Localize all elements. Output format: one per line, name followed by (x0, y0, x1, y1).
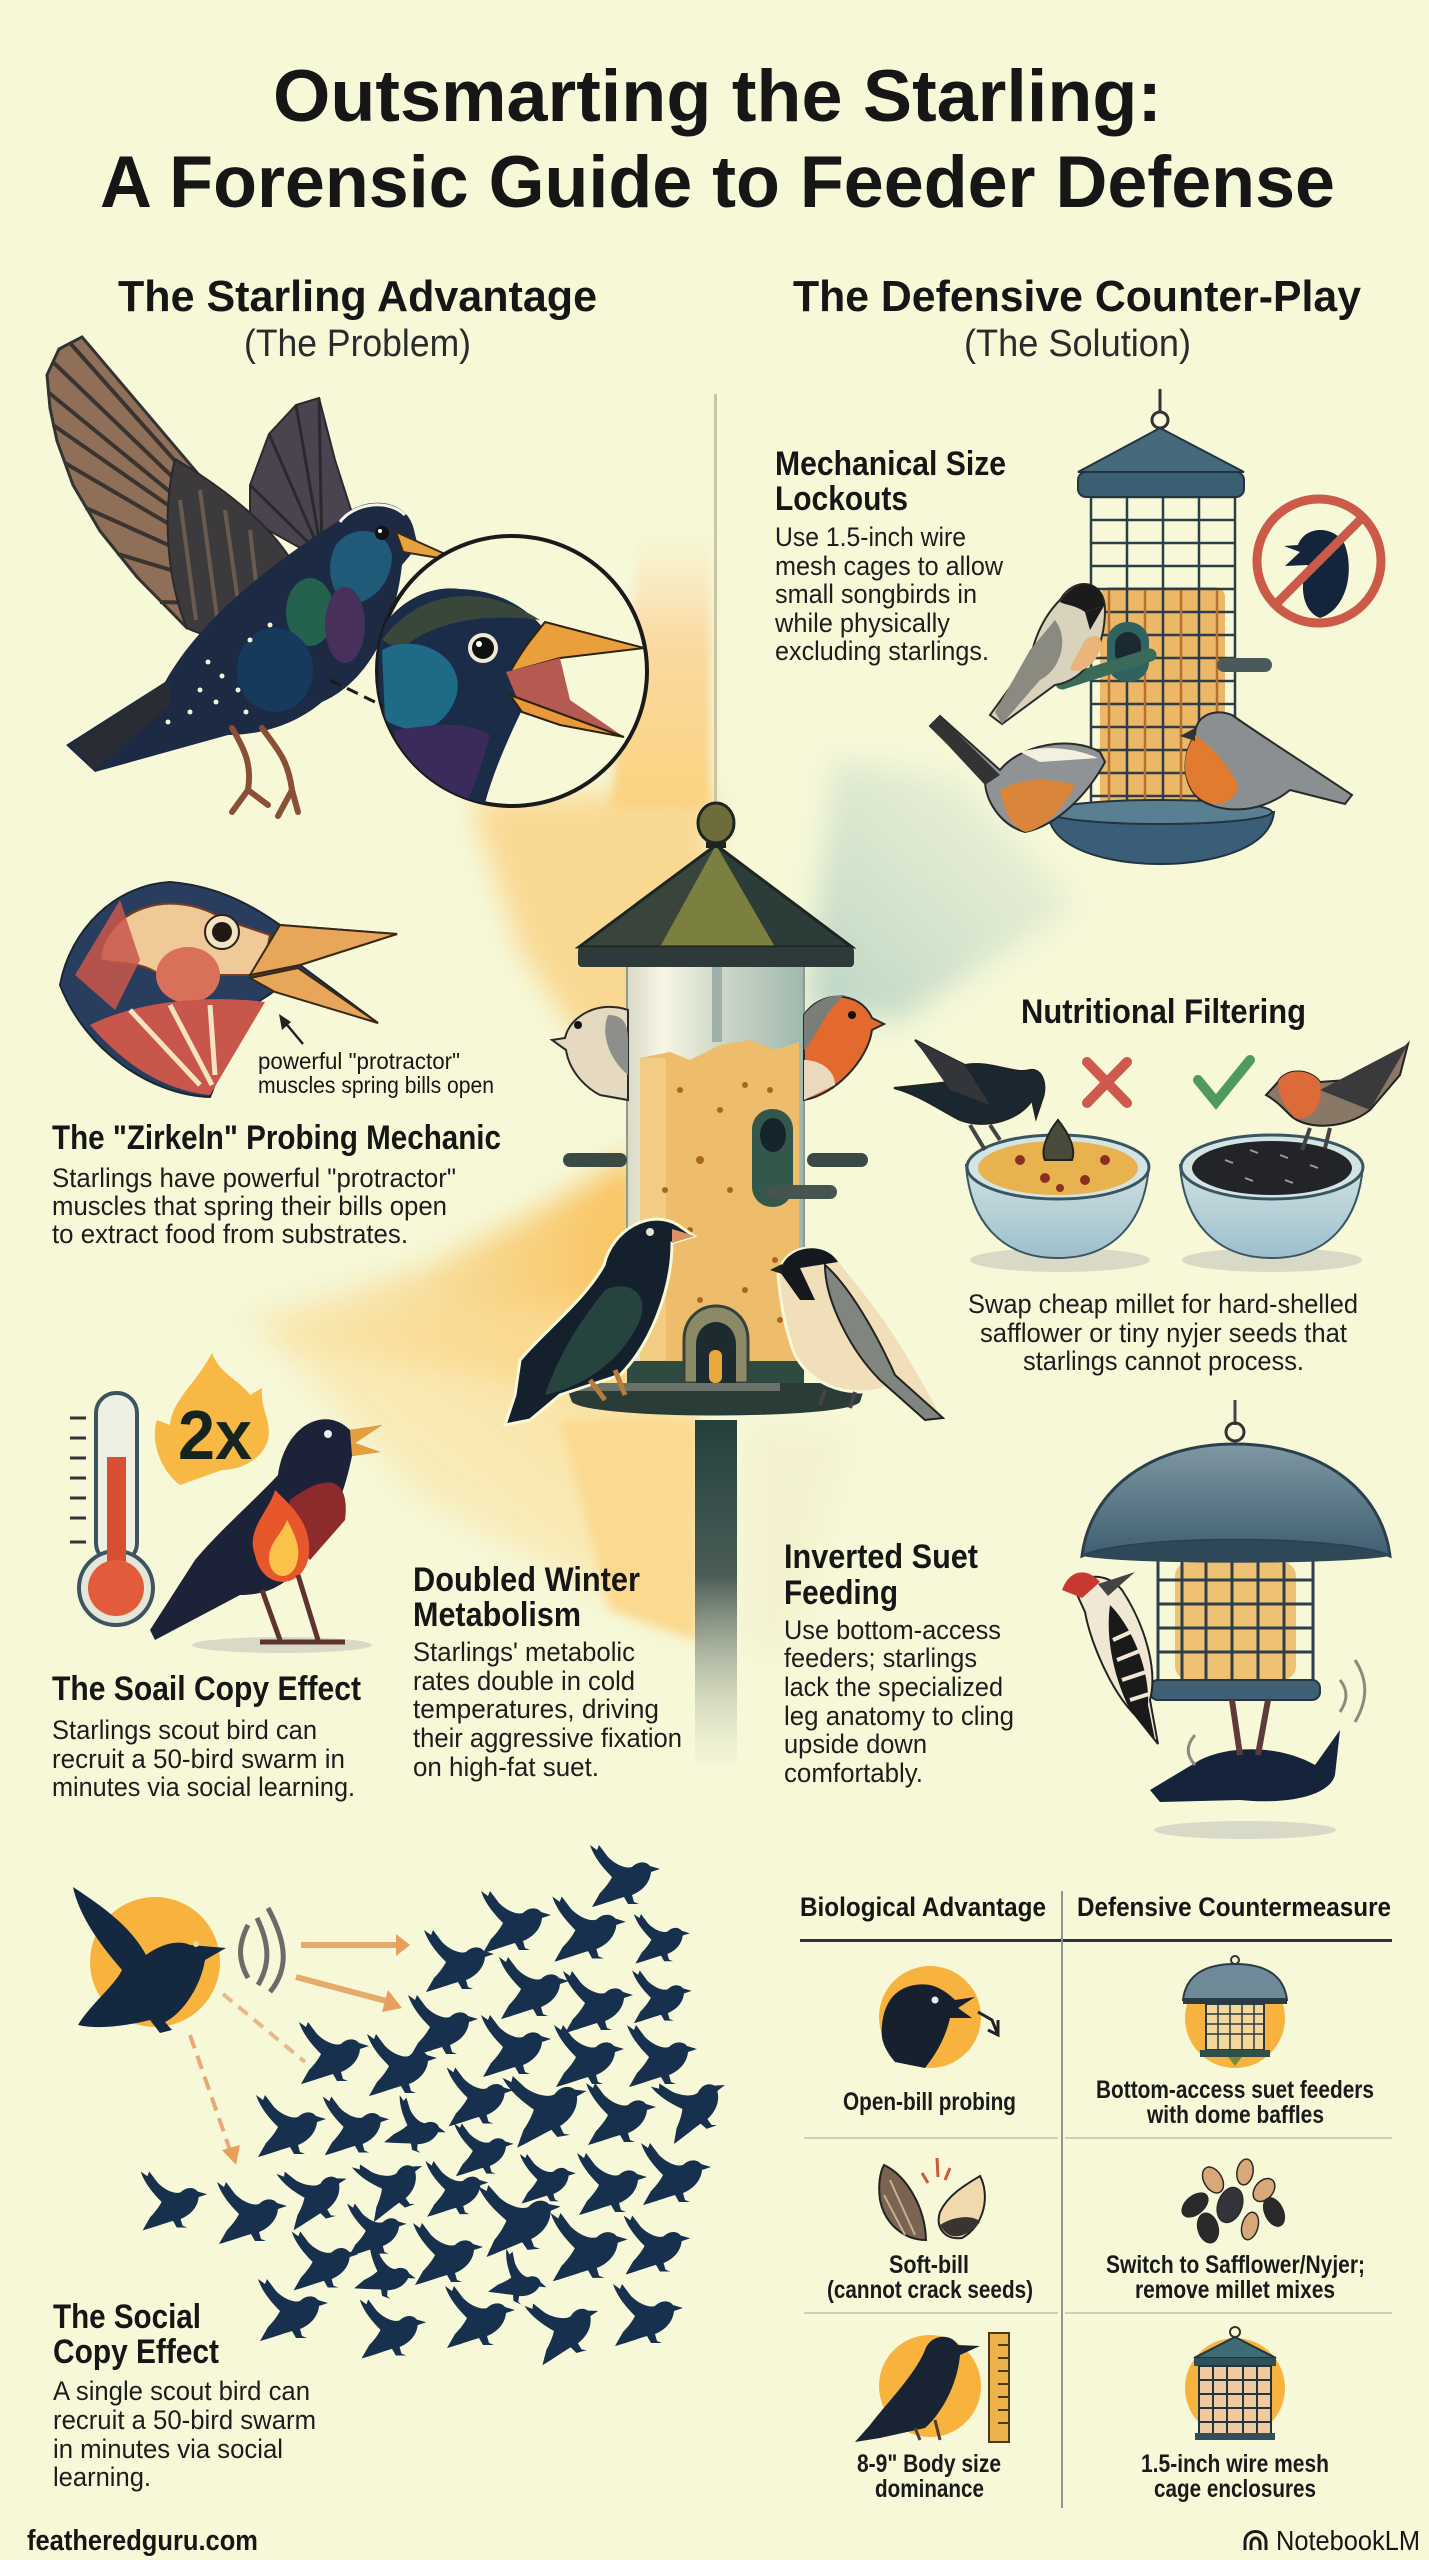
panel: social copy effect text: in minutes via social (53, 2434, 283, 2464)
icon: 2x flame (155, 1353, 269, 1485)
panel: doubled winter metabolism text: their aggressive fixation (413, 1723, 682, 1753)
panel: zirkeln probing mechanic text: muscles that spring their bills open (52, 1191, 447, 1221)
label: body size dominance: dominance (875, 2475, 984, 2503)
panel: swap seeds text (968, 1289, 1358, 1376)
panel: inverted suet feeding text: lack the specialized (784, 1672, 1003, 1702)
table headers: Defensive Countermeasure (1077, 1892, 1391, 1922)
panel: inverted suet feeding text (784, 1538, 1014, 1788)
icon: thermometer (70, 1393, 153, 1625)
panel: social copy effect text: Copy Effect (53, 2333, 219, 2371)
panel: social copy effect text: learning. (53, 2462, 151, 2492)
panel: inverted suet feeding text: feeders; starlings (784, 1643, 977, 1673)
panel: mechanical size lockouts text: while physically (774, 608, 950, 638)
panel: doubled winter metabolism text (413, 1561, 682, 1782)
icon: 2x flame: 2x (178, 1396, 252, 1474)
bird: chickadee on tray (770, 1248, 943, 1420)
icon: wire mesh cage (1185, 2327, 1285, 2440)
caption: protractor muscles: powerful "protractor" (258, 1048, 460, 1074)
heading: the defensive counter-play: (The Solution) (964, 323, 1191, 365)
icon: starling with ruler (855, 2333, 1009, 2442)
icon: seeds soft-bill (879, 2158, 985, 2240)
panel: social copy effect text: recruit a 50-bird swarm (53, 2405, 316, 2435)
illustration: starling swarm (141, 1845, 738, 2366)
panel: doubled winter metabolism text: rates double in cold (413, 1666, 635, 1696)
bird: woodpecker (1062, 1572, 1158, 1744)
label: wire mesh cage enclosures: 1.5-inch wire mesh (1141, 2450, 1329, 2478)
label: soft-bill (827, 2251, 1033, 2304)
heading: the defensive counter-play: The Defensive Counter-Play (793, 272, 1362, 321)
icon: bottom-access suet feeder (1183, 1956, 1287, 2068)
illustration: seed bowls comparison (966, 1120, 1363, 1272)
title: A Forensic Guide to Feeder Defense (100, 142, 1335, 223)
illustration: dome suet feeder (1082, 1400, 1390, 1700)
label: wire mesh cage enclosures (1141, 2450, 1329, 2503)
bird: nuthatch on mesh feeder (930, 716, 1105, 832)
illustration: anatomical starling head (60, 882, 397, 1097)
arrows: recruiting signal (190, 1934, 410, 2165)
panel: zirkeln probing mechanic text: The "Zirkeln" Probing Mechanic (52, 1119, 501, 1157)
label: soft-bill: (cannot crack seeds) (827, 2276, 1033, 2304)
panel: doubled winter metabolism text: Starlings' metabolic (413, 1637, 635, 1667)
label: switch to safflower: Switch to Safflower/Nyjer; (1106, 2251, 1365, 2279)
panel: mechanical size lockouts text: mesh cages to allow (775, 551, 1003, 581)
panel: social copy effect text: The Social (53, 2298, 201, 2336)
label: body size dominance (857, 2450, 1001, 2503)
bird: tan bird on feeder (552, 1007, 628, 1100)
icon: sound waves (240, 1908, 283, 1992)
panel: mechanical size lockouts text: small songbirds in (775, 579, 977, 609)
bird: chickadee on mesh feeder (990, 584, 1105, 724)
panel: mechanical size lockouts text: Mechanical Size (775, 445, 1006, 483)
panel: swap seeds text: starlings cannot process. (1023, 1346, 1304, 1376)
arrow: protractor muscles (279, 1014, 303, 1044)
illustration: flying starling (47, 337, 463, 816)
panel: mechanical size lockouts text: excluding starlings. (775, 636, 989, 666)
icon: green check mark (1198, 1060, 1250, 1102)
illustration: mesh cage feeder (1048, 389, 1274, 864)
panel: social copy effect text (53, 2298, 316, 2492)
label: wire mesh cage enclosures: cage enclosures (1154, 2475, 1316, 2503)
illustration: starling with inner flame (150, 1419, 382, 1653)
bird: finch at nyjer bowl (1266, 1044, 1408, 1150)
panel: zirkeln probing mechanic text: Starlings have powerful "protractor" (52, 1163, 456, 1193)
icon: red x mark (1087, 1062, 1127, 1103)
panel: soail copy effect text (52, 1670, 361, 1802)
center divider (714, 394, 717, 814)
bird: robin on feeder (804, 995, 884, 1100)
panel: zirkeln probing mechanic text (52, 1119, 501, 1249)
panel: inverted suet feeding text: leg anatomy to cling (784, 1701, 1014, 1731)
panel: inverted suet feeding text: Use bottom-access (784, 1615, 1001, 1645)
panel: doubled winter metabolism text: temperatures, driving (413, 1694, 659, 1724)
heading: the starling advantage: The Starling Advantage (118, 272, 597, 321)
panel: mechanical size lockouts text (774, 445, 1006, 666)
label: soft-bill: Soft-bill (889, 2251, 969, 2279)
panel: inverted suet feeding text: comfortably. (784, 1758, 923, 1788)
label: bottom-access suet feeders: with dome baffles (1146, 2101, 1324, 2129)
caption: protractor muscles (258, 1048, 494, 1098)
heading: the defensive counter-play (793, 272, 1362, 365)
table headers (800, 1892, 1391, 1922)
caption: protractor muscles: muscles spring bills open (258, 1072, 494, 1098)
icon: safflower and nyjer seeds (1178, 2158, 1288, 2245)
panel: doubled winter metabolism text: Doubled Winter (413, 1561, 640, 1599)
panel: nutritional filtering heading: Nutritional Filtering (1021, 993, 1306, 1031)
panel: soail copy effect text: Starlings scout bird can (52, 1715, 317, 1745)
panel: mechanical size lockouts text: Lockouts (775, 480, 908, 518)
icon: open-bill probing (879, 1966, 998, 2068)
panel: doubled winter metabolism text: Metabolism (413, 1596, 581, 1634)
panel: soail copy effect text: The Soail Copy Effect (52, 1670, 361, 1708)
label: bottom-access suet feeders: Bottom-access suet feeders (1096, 2076, 1374, 2104)
label: bottom-access suet feeders (1096, 2076, 1374, 2129)
panel: inverted suet feeding text: upside down (784, 1729, 927, 1759)
heading: the starling advantage (118, 272, 597, 365)
panel: swap seeds text: safflower or tiny nyjer seeds that (980, 1318, 1347, 1348)
panel: doubled winter metabolism text: on high-fat suet. (413, 1752, 599, 1782)
bird: robin on mesh feeder (1180, 712, 1352, 809)
bird: starling at millet bowl (894, 1040, 1044, 1150)
label: switch to safflower (1106, 2251, 1365, 2304)
footer: source site: featheredguru.com (27, 2525, 258, 2557)
panel: mechanical size lockouts text: Use 1.5-inch wire (775, 522, 966, 552)
panel: soail copy effect text: minutes via social learning. (52, 1772, 355, 1802)
table headers: Biological Advantage (800, 1892, 1046, 1922)
background glow rays (220, 530, 1075, 1650)
panel: inverted suet feeding text: Inverted Suet (784, 1538, 978, 1576)
panel: social copy effect text: A single scout bird can (53, 2376, 310, 2406)
label: switch to safflower: remove millet mixes (1135, 2276, 1335, 2304)
icon: no starling sign (1257, 499, 1381, 623)
dashed zoom pointer (330, 680, 383, 706)
comparison table (800, 1891, 1392, 2508)
illustration: scout bird (73, 1887, 226, 2033)
label: body size dominance: 8-9" Body size (857, 2450, 1001, 2478)
panel: zirkeln probing mechanic text: to extract food from substrates. (52, 1219, 408, 1249)
label: open-bill probing: Open-bill probing (843, 2088, 1016, 2116)
title: Outsmarting the Starling: (273, 56, 1162, 137)
panel: soail copy effect text: recruit a 50-bird swarm in (52, 1744, 345, 1774)
title (100, 56, 1335, 223)
illustration: magnified starling head (377, 536, 647, 815)
panel: inverted suet feeding text: Feeding (784, 1574, 898, 1612)
illustration: central feeder (563, 803, 868, 1765)
panel: swap seeds text: Swap cheap millet for hard-shelled (968, 1289, 1358, 1319)
bird: hanging starling (1150, 1660, 1365, 1839)
heading: the starling advantage: (The Problem) (244, 323, 471, 365)
bird: starling on tray (505, 1219, 695, 1425)
